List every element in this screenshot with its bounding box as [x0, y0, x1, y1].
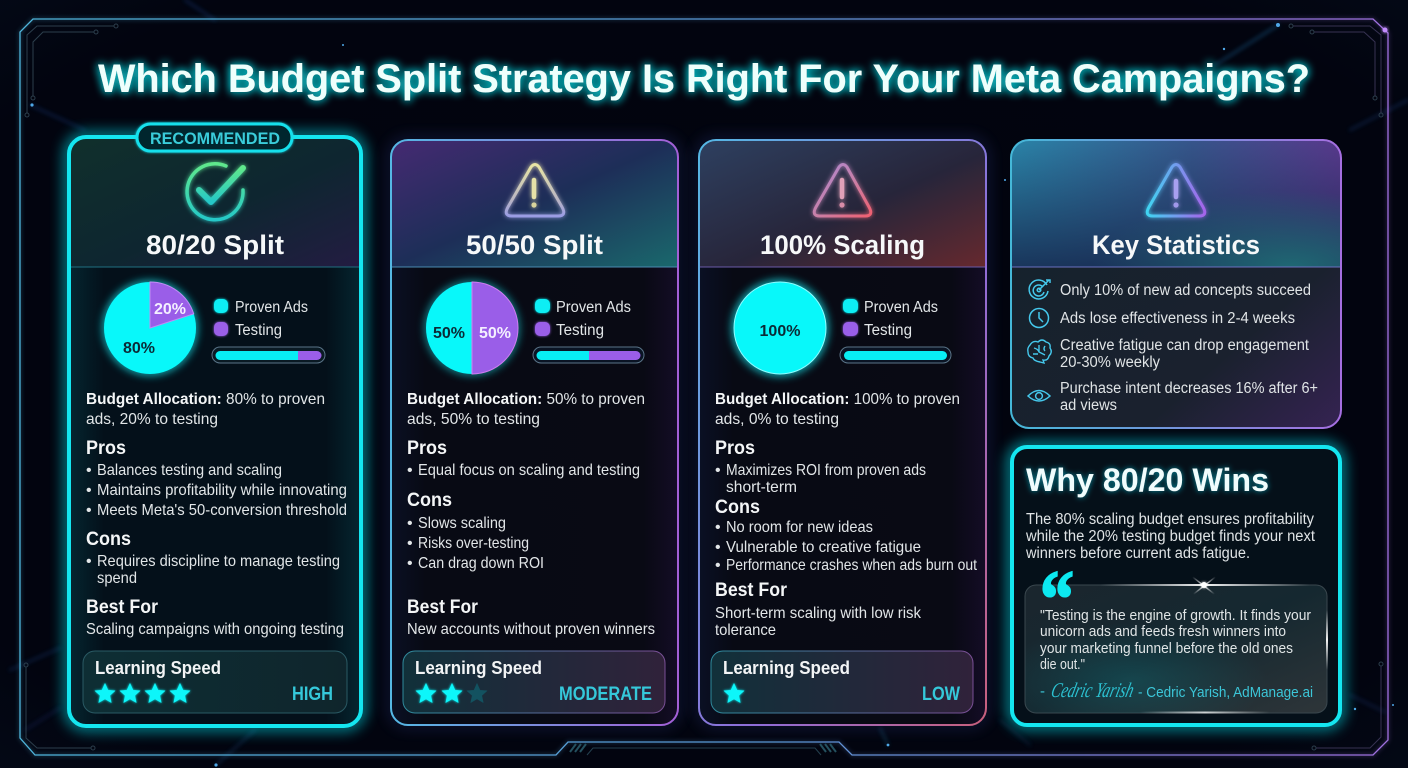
pros list: Maximizes ROI from proven ads	[726, 462, 926, 479]
pros list	[86, 437, 347, 519]
pie chart: 80/20: 80%	[123, 340, 155, 357]
best for	[407, 596, 655, 638]
cons list: •	[86, 553, 92, 570]
split bar	[212, 347, 325, 363]
panel: key statistics	[1011, 140, 1341, 428]
stat: purchase intent	[1060, 380, 1318, 414]
pros list: Pros	[407, 437, 447, 459]
pros list: •	[86, 502, 92, 519]
cons list: Slows scaling	[418, 515, 506, 532]
pros list: Balances testing and scaling	[97, 462, 282, 479]
stat: creative fatigue: 20-30% weekly	[1060, 354, 1160, 371]
pie chart: 100%	[731, 279, 829, 377]
icon: eye	[1028, 390, 1050, 401]
pros list: •	[715, 462, 721, 479]
pros list: short-term	[726, 479, 797, 496]
cons list: Cons	[715, 496, 760, 518]
icon: target	[1029, 280, 1050, 299]
split bar	[840, 347, 951, 363]
pie chart: 50/50	[424, 280, 520, 376]
learning speed: moderate: Learning Speed	[415, 657, 542, 678]
stat: creative fatigue	[1060, 337, 1310, 371]
panel: 80/20 split: ads, 20% to testing	[86, 411, 218, 428]
pie chart: 100%: 100%	[760, 323, 800, 340]
pie chart: 80/20	[102, 280, 198, 376]
icon: brain	[1028, 340, 1051, 363]
learning speed: low: LOW	[922, 684, 960, 705]
stat: purchase intent: Purchase intent decreases 16% after 6+	[1060, 380, 1318, 397]
title: Which Budget Split Strategy Is Right For Your Meta Campaigns?	[98, 57, 1310, 101]
learning speed: low: Learning Speed	[723, 657, 850, 678]
recommended badge: RECOMMENDED	[150, 129, 280, 148]
pie chart: 80/20: 20%	[154, 301, 186, 318]
recommended badge	[137, 124, 292, 151]
best for: Best For	[86, 596, 158, 618]
cons list: •	[715, 519, 721, 536]
cons list	[86, 528, 340, 587]
cons list: •	[407, 535, 413, 552]
legend: Testing	[556, 322, 604, 339]
legend: Proven Ads	[556, 299, 631, 316]
best for: Scaling campaigns with ongoing testing	[86, 621, 344, 638]
learning speed: moderate: MODERATE	[559, 684, 652, 705]
pros list: •	[407, 462, 413, 479]
pros list	[715, 437, 926, 496]
pros list: Meets Meta's 50-conversion threshold	[97, 502, 347, 519]
pros list: Equal focus on scaling and testing	[418, 462, 640, 479]
pros list: Pros	[715, 437, 755, 459]
quote text: unicorn ads and feeds fresh winners into	[1040, 624, 1286, 640]
quote mark: “	[1040, 556, 1074, 644]
best for	[86, 596, 344, 638]
learning speed: high	[83, 651, 347, 713]
quote sparkle	[1100, 576, 1328, 714]
stat: ad concepts: Only 10% of new ad concepts succeed	[1060, 282, 1311, 299]
best for: Best For	[715, 579, 787, 601]
budget allocation text: Budget Allocation: 50% to proven	[407, 391, 645, 408]
explanation text: winners before current ads fatigue.	[1025, 545, 1250, 562]
pros list: Maintains profitability while innovating	[97, 482, 347, 499]
cons list: Risks over-testing	[418, 535, 529, 552]
pros list	[407, 437, 640, 479]
budget allocation text: Budget Allocation: 100% to proven	[715, 391, 960, 408]
legend	[535, 299, 631, 339]
quote text	[1040, 608, 1311, 673]
heading: why 80/20 wins: Why 80/20 Wins	[1026, 462, 1269, 498]
legend: Testing	[864, 322, 912, 339]
panel: 50/50 split: ads, 50% to testing	[407, 411, 540, 428]
cons list: Requires discipline to manage testing	[97, 553, 340, 570]
icon: warning triangle	[1147, 164, 1205, 216]
cons list: •	[407, 515, 413, 532]
pie chart: 50/50: 50%	[479, 325, 511, 342]
cons list: Can drag down ROI	[418, 555, 544, 572]
icon: clock	[1030, 308, 1048, 328]
split bar	[533, 347, 644, 363]
icon: warning triangle	[506, 164, 564, 216]
explanation text: The 80% scaling budget ensures profitability	[1026, 511, 1314, 528]
cons list: •	[407, 555, 413, 572]
best for: New accounts without proven winners	[407, 621, 655, 638]
pie chart: 50/50: 50%	[433, 325, 465, 342]
learning speed: high: HIGH	[292, 684, 333, 705]
cons list: Cons	[86, 528, 131, 550]
best for: Short-term scaling with low risk	[715, 605, 922, 622]
pros list: Pros	[86, 437, 126, 459]
cons list	[715, 496, 977, 574]
icon: warning triangle	[814, 164, 871, 216]
panel: 80/20 split	[69, 124, 361, 726]
panel: why 80/20 wins	[1012, 447, 1340, 725]
quote text: your marketing funnel before the old ones	[1040, 641, 1293, 657]
heading: 50/50 split: 50/50 Split	[466, 230, 603, 260]
panel: 100% scaling: ads, 0% to testing	[715, 411, 839, 428]
legend: Testing	[235, 322, 282, 339]
signature and attribution: -	[1040, 683, 1045, 700]
signature and attribution	[1040, 678, 1313, 702]
legend: Proven Ads	[864, 299, 938, 316]
cons list: •	[715, 539, 721, 556]
quote box	[1025, 556, 1328, 714]
explanation text	[1025, 511, 1316, 562]
cons list: Vulnerable to creative fatigue	[726, 539, 921, 556]
stat: effectiveness: Ads lose effectiveness in 2-4 weeks	[1060, 310, 1295, 327]
best for: Best For	[407, 596, 478, 618]
stat: purchase intent: ad views	[1060, 397, 1117, 414]
pros list: •	[86, 462, 92, 479]
cons list: spend	[97, 570, 137, 587]
stat: creative fatigue: Creative fatigue can drop engagement	[1060, 337, 1310, 354]
quote text: die out."	[1040, 657, 1085, 673]
explanation text: while the 20% testing budget finds your next	[1025, 528, 1316, 545]
cons list: Cons	[407, 489, 452, 511]
signature and attribution: Cedric Yarish	[1049, 678, 1137, 702]
panel: 100% scaling	[699, 140, 986, 725]
panel: 50/50 split	[391, 140, 678, 725]
heading: 100% scaling: 100% Scaling	[760, 230, 925, 260]
cons list: No room for new ideas	[726, 519, 873, 536]
quote text: "Testing is the engine of growth. It finds your	[1040, 608, 1311, 624]
budget allocation text: Budget Allocation: 80% to proven	[86, 391, 325, 408]
learning speed: low	[711, 651, 973, 713]
heading: 80/20 split: 80/20 Split	[146, 230, 284, 260]
cons list: •	[715, 557, 721, 574]
icon: check circle	[187, 164, 243, 220]
cons list: Performance crashes when ads burn out	[726, 557, 977, 574]
learning speed: high: Learning Speed	[95, 657, 221, 678]
legend: Proven Ads	[235, 299, 308, 316]
best for: tolerance	[715, 622, 776, 639]
legend	[843, 299, 938, 339]
cons list	[407, 489, 544, 572]
best for	[715, 579, 922, 639]
heading: key statistics: Key Statistics	[1092, 230, 1260, 260]
pros list: •	[86, 482, 92, 499]
signature and attribution: - Cedric Yarish, AdManage.ai	[1138, 684, 1313, 701]
learning speed: moderate	[403, 651, 665, 713]
legend	[214, 299, 308, 339]
